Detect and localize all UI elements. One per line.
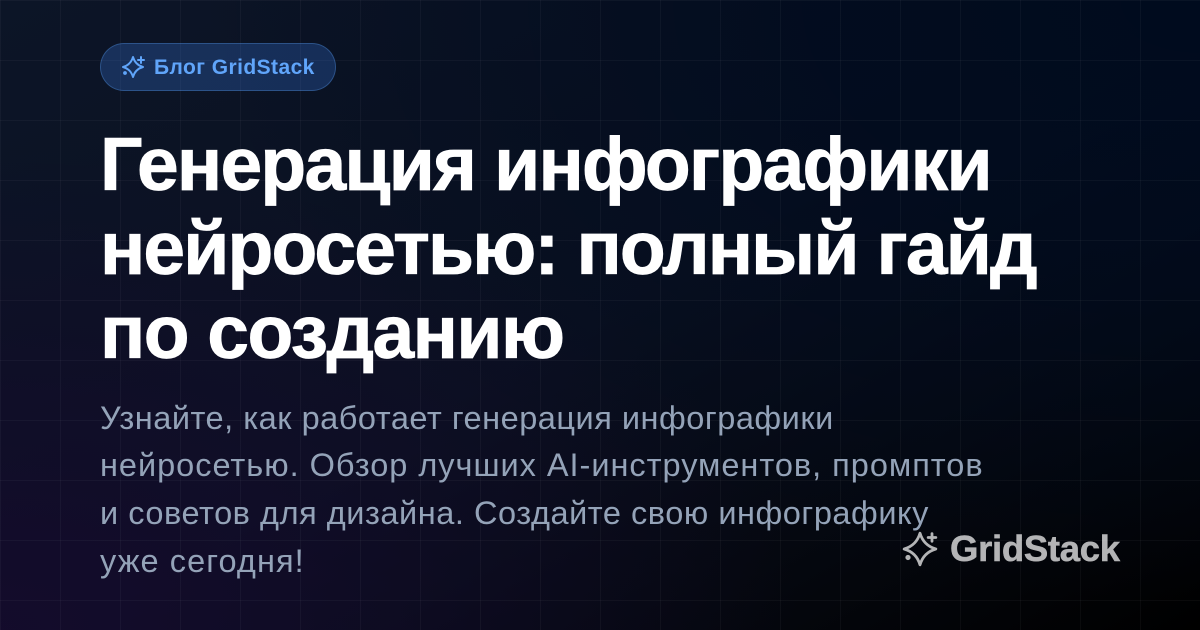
badge: Блог GridStack: Блог GridStack bbox=[154, 56, 315, 79]
title bbox=[100, 122, 1037, 374]
text: Генерация инфографики bbox=[100, 122, 991, 206]
text: нейросетью: полный гайд bbox=[100, 206, 1036, 290]
icon: logo sparkle bbox=[902, 532, 938, 566]
text: Узнайте, как работает генерация инфографики bbox=[100, 400, 834, 436]
logo: GridStack: GridStack bbox=[950, 528, 1120, 569]
text: уже сегодня! bbox=[100, 543, 305, 579]
text: по созданию bbox=[100, 290, 564, 374]
subtitle text bbox=[100, 400, 984, 579]
text: нейросетью. Обзор лучших AI-инструментов, промптов bbox=[100, 447, 984, 483]
text: и советов для дизайна. Создайте свою инфографику bbox=[100, 495, 929, 531]
badge: Блог GridStack bbox=[100, 43, 336, 91]
icon: sparkle bbox=[122, 56, 145, 78]
